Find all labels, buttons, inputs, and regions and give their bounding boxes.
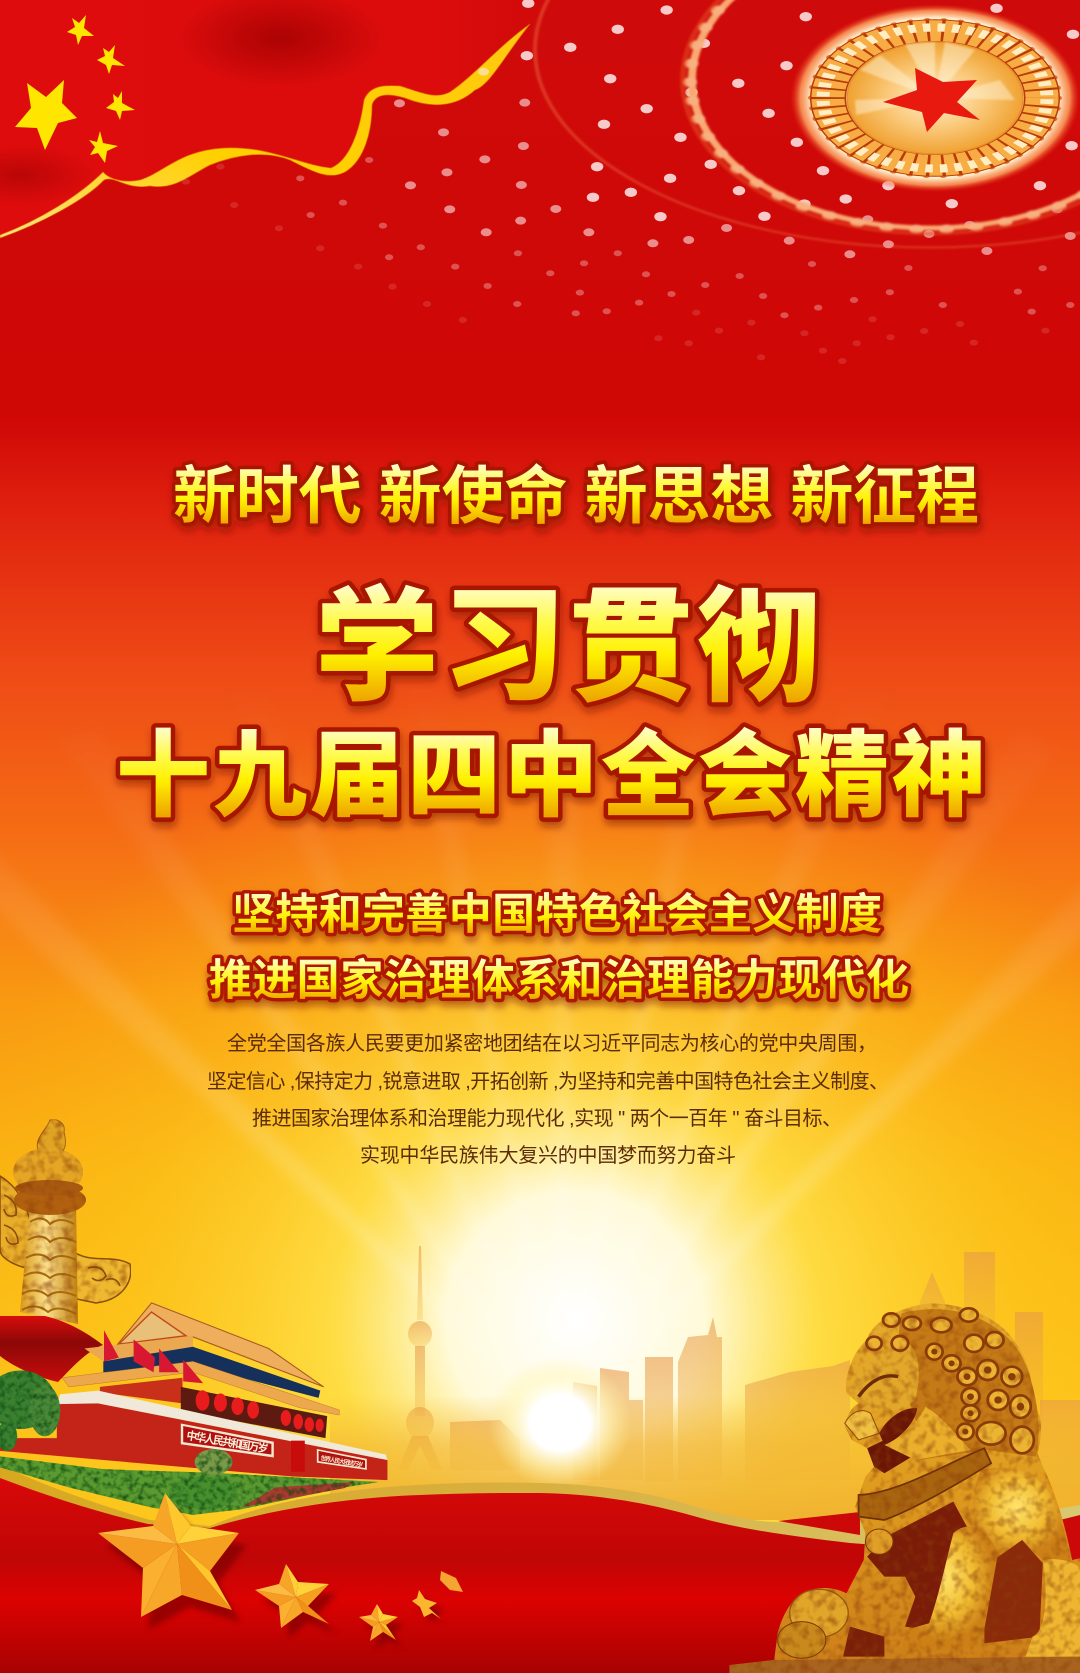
gate wall: [0, 1403, 387, 1480]
plaque left: 中华人民共和国万岁: [186, 1428, 269, 1456]
star three: [359, 1604, 398, 1641]
plaque right: [317, 1449, 367, 1470]
emblem: [790, 4, 1080, 192]
lanterns: [196, 1390, 324, 1432]
gate door: [291, 1441, 305, 1472]
body paragraph: 实现中华民族伟大复兴的中国梦而努力奋斗: [360, 1144, 736, 1167]
building dark band: [103, 1347, 320, 1398]
wall white cornice: [57, 1391, 387, 1460]
colonnade: [181, 1387, 327, 1438]
body paragraph: 推进国家治理体系和治理能力现代化 ,实现 " 两个一百年 " 奋斗目标、: [252, 1107, 842, 1130]
emblem petals: [812, 21, 1058, 175]
scalloped rings: [535, 0, 1080, 248]
left eave: [84, 1336, 193, 1361]
huabiao column: [0, 1120, 131, 1324]
body paragraph: 全党全国各族人民要更加紧密地团结在以习近平同志为核心的党中央周围，: [227, 1032, 877, 1055]
ground haze: [330, 1395, 1080, 1520]
face: [848, 1340, 919, 1410]
tree: [0, 1370, 60, 1451]
column shaft: [20, 1205, 78, 1324]
stone base: [729, 1657, 1080, 1673]
lion finial: [37, 1120, 65, 1152]
red tip right: [778, 1512, 860, 1535]
distant city skyline: [398, 1246, 1080, 1500]
lion shoulder: [973, 1468, 1071, 1567]
plaque right: 世界人民大团结万岁: [320, 1454, 364, 1469]
emblem disc: [847, 42, 1023, 154]
gold band: [0, 1465, 1080, 1560]
stone lion: [729, 1303, 1080, 1673]
star two: [255, 1564, 329, 1628]
main title line 1: 学习贯彻: [315, 579, 820, 717]
cloud carving: [22, 1218, 76, 1314]
flag cloth: [0, 0, 545, 235]
oriental pearl tower: [398, 1246, 442, 1470]
tagline: 新时代 新使命 新思想 新征程: [173, 462, 979, 532]
drape: [0, 1316, 103, 1382]
mouth: [867, 1408, 917, 1473]
curl centres: [931, 1349, 1024, 1435]
upper roof: [117, 1303, 324, 1387]
lion haunch: [1026, 1559, 1080, 1657]
decorative dots field: [182, 0, 1079, 364]
red wave foreground: [0, 1465, 1080, 1673]
jaw: [884, 1407, 970, 1460]
greenery: [0, 1370, 379, 1515]
bell: [865, 1529, 893, 1554]
gable: [119, 1312, 186, 1344]
lower roof: [62, 1361, 339, 1415]
bush: [195, 1449, 232, 1475]
star four: [412, 1590, 441, 1619]
red ribbon body: [0, 1478, 1080, 1673]
mane curls: [866, 1308, 1034, 1453]
subtitle line 1: 坚持和完善中国特色社会主义制度: [232, 891, 882, 939]
sun: [488, 1357, 632, 1489]
cloud wings: [0, 1176, 131, 1303]
tiananmen: [0, 1303, 387, 1480]
body paragraph: 坚定信心 ,保持定力 ,锐意进取 ,开拓创新 ,为坚持和完善中国特色社会主义制度、: [207, 1070, 889, 1093]
column cap: [14, 1185, 86, 1215]
big star: [98, 1493, 239, 1617]
flags: [104, 1330, 203, 1383]
front leg: [902, 1527, 998, 1653]
flag stars: [15, 15, 135, 163]
emblem rays: [855, 42, 1015, 115]
emblem red star: [883, 68, 980, 132]
subtitle line 2: 推进国家治理体系和治理能力现代化: [209, 957, 909, 1005]
gold ribbon: [0, 24, 530, 238]
lion dark belly: [867, 1502, 970, 1630]
star shadows: [106, 1505, 447, 1649]
lion body silhouette: [729, 1303, 1080, 1673]
plaque left: [181, 1423, 274, 1457]
left hall wall: [100, 1378, 183, 1403]
hedges: [0, 1456, 379, 1515]
star five: [440, 1571, 463, 1592]
paw and ball: [790, 1589, 848, 1637]
red flowers: [241, 1482, 355, 1508]
gold star group: [98, 1493, 463, 1649]
mane base: [898, 1309, 1039, 1460]
body paragraph: [207, 1032, 889, 1167]
main title line 2: 十九届四中全会精神: [116, 723, 986, 828]
ornamented collar: [859, 1448, 991, 1520]
